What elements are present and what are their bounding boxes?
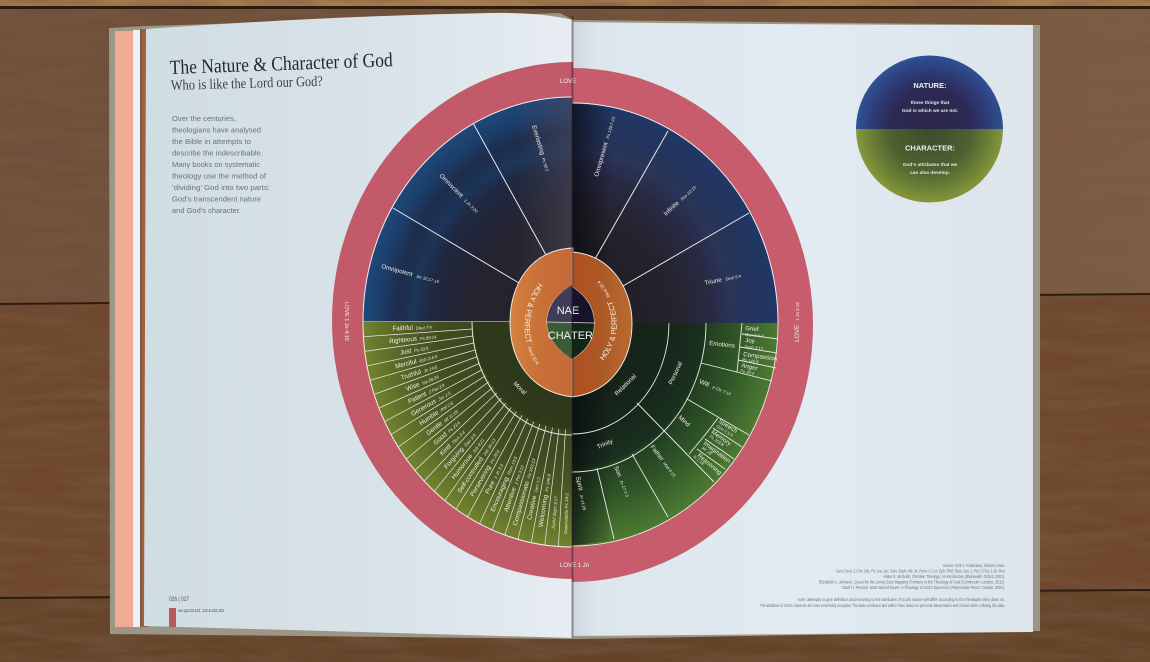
character segments, left: moral attributes: Attentive1 Pet 3:12 — [503, 463, 526, 513]
intro text block: Many books on systematic — [172, 160, 260, 169]
sources and note: The attributes of God’s character are more universally accepted. The data contributor and author have drawn on personal interpretation and choices when collating this data. — [760, 603, 1005, 608]
inset key circle: CHARACTER: — [905, 144, 955, 152]
character segments, right: relational attributes — [572, 323, 778, 546]
love outer ring: LOVE1 Jn 4:16 — [794, 302, 801, 342]
nature segments, left: Omniscient 1 Jn 3:20 — [438, 172, 480, 215]
character segments, left: moral attributes: Dependable Ps 18:2 — [563, 492, 569, 534]
title: The Nature & Character of God — [169, 49, 393, 79]
centre: nature and character: CHA — [548, 330, 572, 342]
right page — [573, 22, 1033, 636]
character segments, left: moral attributes: CompassionatePs 103:13 — [512, 457, 537, 527]
sources and note: Alister E. McGrath, Christian Theology: An Introduction (Blackwells: Oxford, 2001). — [883, 574, 1005, 579]
character segments, left: moral attributes: HumblePhil 2:8 — [418, 399, 455, 427]
character segments, right: relational attributes: Ps 145:9 — [742, 357, 760, 364]
character segments, left: moral attributes: GoodPs 23:6 — [432, 419, 462, 447]
centre: nature and character: TER — [571, 330, 593, 342]
sources and note — [760, 563, 1006, 608]
character segments, right: relational attributes: Gen 1:3-5 — [715, 424, 734, 438]
book cover and page stack — [109, 13, 1040, 639]
nature segments, left: Omnipotent Jer 32:17-19 — [380, 263, 440, 286]
circular diagram — [332, 62, 813, 582]
intro text block: and God’s character. — [172, 206, 241, 215]
character segments, left: moral attributes: KindTitus 3:4 — [439, 429, 467, 457]
intro text block: theology use the method of — [172, 172, 267, 180]
nature segments, right: Triune Deut 6:4 — [704, 272, 742, 287]
character segments, right: relational attributes: Son Jn 17:1-3 — [612, 465, 631, 498]
character segments, left: moral attributes: GentleMt 11:29 — [425, 408, 460, 437]
character segments, left: moral attributes: Joyful Zeph 3:17 — [551, 495, 559, 531]
nature segments, right: InfiniteRev 22:13 — [663, 184, 698, 217]
character segments, right: relational attributes: Mind — [677, 414, 692, 429]
character segments, left: moral attributes: Faithful Deut 7:9 — [392, 324, 432, 333]
intro text block: God’s transcendent nature — [172, 194, 261, 204]
inset key circle: God’s attributes that we — [903, 162, 958, 168]
love outer ring: LOVE 1 Jn 4:16 — [343, 302, 349, 341]
sources and note: Elizabeth A. Johnson, Quest for the Living God: Mapping Frontiers in the Theology of God (Continuum: London, 2011). — [819, 580, 1005, 584]
character segments, right: relational attributes: Father Matt 6:15 — [648, 444, 678, 479]
intro text block: ‘dividing’ God into two parts: — [172, 183, 270, 192]
character segments, right: relational attributes: Trinity — [596, 438, 615, 451]
character segments, right: relational attributes: Ps 103:8 — [708, 434, 725, 448]
character segments, right: relational attributes: Relational — [613, 373, 638, 397]
character segments, left: moral attributes: Truthful Jn 14:6 — [400, 363, 439, 382]
character segments, right: relational attributes: Will 2 Chr 7:14 — [698, 378, 733, 398]
character segments, left: moral attributes: CreativeGen 1:1 — [526, 475, 542, 521]
character segments, right: relational attributes: Spirit Jn 14:26 — [574, 476, 588, 511]
holy and perfect ring — [510, 248, 632, 398]
page number: 026 | 027 — [169, 597, 190, 603]
love outer ring: LOVE 1 Jn — [560, 563, 589, 569]
love outer ring: LOVE — [560, 79, 576, 85]
character segments, left: moral attributes: EncouragingRom 15:5 — [490, 455, 519, 513]
character segments, right: relational attributes: Personal — [667, 361, 684, 386]
character segments, right: relational attributes: Emotions — [709, 340, 735, 350]
book gutter — [572, 16, 574, 638]
character segments, left: moral attributes: Self-controlledJob 36:13 — [456, 437, 498, 495]
intro text block: theologians have analysed — [172, 126, 261, 134]
character segments, right: relational attributes: Zeph 3:17 — [743, 344, 764, 351]
holy and perfect ring: HOLY & PERFECTDeut 32:4 — [598, 280, 617, 360]
nature segments, left — [363, 97, 572, 322]
inset key circle: can also develop. — [910, 170, 950, 176]
centre: nature and character: E — [572, 305, 579, 317]
character segments, right: relational attributes: Anger — [741, 362, 758, 372]
sources and note: Clark H. Pinnock, Most Moved Mover: A Theology of God’s Openness (Paternoster Press: Carlisle, 2001). — [842, 585, 1005, 590]
character segments, left: moral attributes: WelcomingPs 146:9 — [538, 473, 553, 528]
character segments, left: moral attributes: Patient2 Pet 3:9 — [407, 381, 446, 406]
inset key circle — [856, 56, 1003, 203]
centre: nature and character — [547, 285, 594, 359]
character segments, right: relational attributes: Grief — [745, 325, 759, 333]
character segments, left: moral attributes: ForgivingDan 9:9 — [443, 431, 478, 471]
intro text block: the Bible in attempts to — [172, 137, 251, 146]
love outer ring — [332, 62, 813, 582]
sources and note: note: attempts to give definition and meaning to the attributes of God’s nature will differ according to the theologies they draw on. — [798, 597, 1005, 602]
character segments, right: relational attributes: Memory — [710, 429, 733, 448]
holy and perfect ring: HOLY & PERFECT Deut 32:4 — [524, 283, 543, 364]
nature segments, right — [572, 103, 778, 323]
inset key circle: God is which we are not. — [902, 108, 958, 114]
intro text block: describe the indescribable. — [172, 148, 263, 158]
character segments, right: relational attributes: Reasoning — [696, 452, 723, 477]
inset key circle: those things that — [911, 100, 950, 106]
subtitle: Who is like the Lord our God? — [171, 74, 323, 94]
character segments, left: moral attributes: PerseveringPs 25:6 — [469, 448, 502, 498]
sources and note: Gen; Deut; 2 Chr; Job; Ps; Isa; Jer; Dan; Zeph; Mt; Jn; Rom; 2 Cor; Eph; Phil; Titus; Jas; 1 Pet; 2 Pet; 1 Jn; Rev — [836, 568, 1006, 574]
character segments, left: moral attributes — [363, 322, 572, 547]
character segments, left: moral attributes: WiseIsa 28:29 — [405, 373, 440, 393]
left page — [144, 13, 573, 638]
character segments, right: relational attributes: Ps 30:5 — [740, 368, 755, 376]
character segments, right: relational attributes: Compassion — [743, 351, 778, 363]
character segments, left: moral attributes: Merciful Eph 2:4-5 — [395, 353, 438, 370]
red cross-reference tab — [169, 608, 176, 627]
centre: nature and character: NA — [557, 305, 573, 317]
character segments, right: relational attributes: Imagination — [702, 440, 732, 465]
intro text block: Over the centuries, — [172, 114, 236, 123]
character segments, left: moral attributes: HumorousJob 8:21 — [451, 436, 486, 481]
character segments, left: moral attributes: Pure1 Jn 3:3 — [484, 462, 505, 495]
character segments, right: relational attributes: Joy — [745, 337, 756, 345]
character segments, left: moral attributes: Righteous Ps 89:14 — [389, 333, 437, 346]
character segments, right: relational attributes: Speech — [717, 418, 739, 435]
character segments, right: relational attributes: Gen 6:5-6 — [745, 332, 765, 339]
inset key circle: NATURE: — [913, 81, 947, 90]
character segments, left: moral attributes: Moral — [512, 380, 527, 396]
cross-reference text: see pp133-133, 142 & 182-183 — [178, 608, 224, 614]
intro text block — [172, 114, 270, 215]
nature segments, right: OmnipresentPs 139:7-10 — [593, 115, 617, 178]
character segments, left: moral attributes: Just Ps 33:5 — [400, 344, 429, 357]
character segments, right: relational attributes: Is 1:18 — [692, 454, 706, 466]
character segments, left: moral attributes: GenerousJas 1:5 — [410, 389, 453, 418]
character segments, right: relational attributes: Jer 18 — [700, 444, 713, 456]
nature segments, left: Everlasting Ps 90:2 — [530, 125, 551, 173]
sources and note: source: Dirk J. Robertson, Miriam Lowe. — [943, 563, 1005, 568]
